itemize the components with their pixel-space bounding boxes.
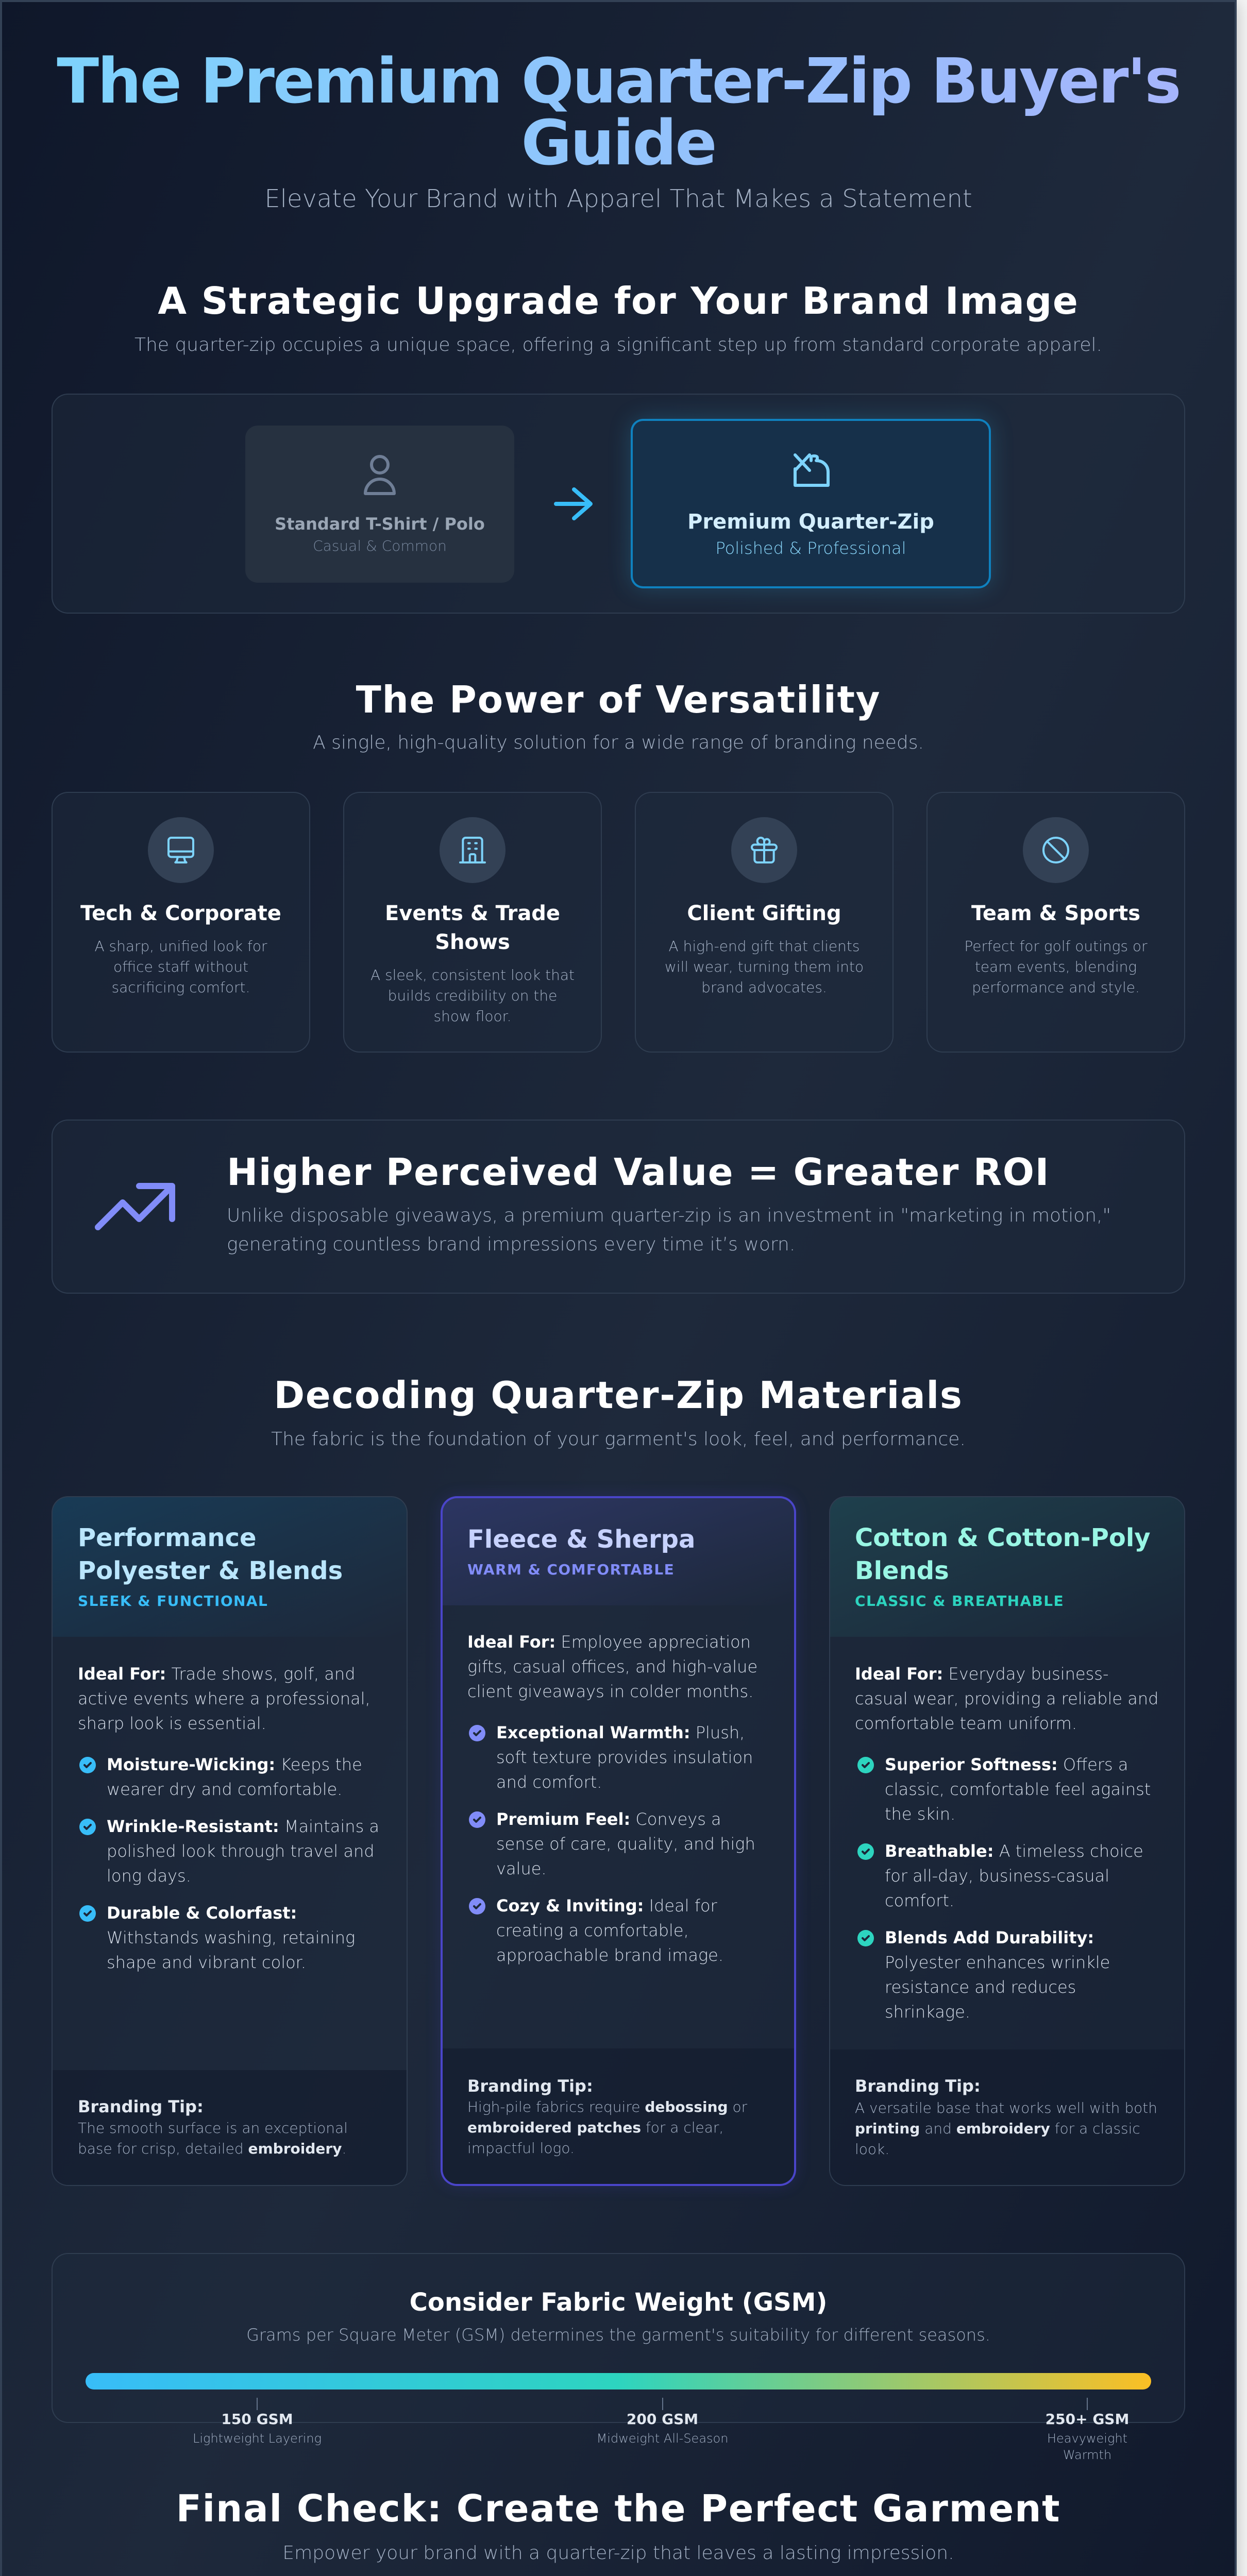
panel: performance polyester: shape and vibrant color. [107, 1953, 306, 1972]
material tag: CLASSIC & BREATHABLE [855, 1592, 1064, 1609]
benefit: Moisture-Wicking: Keeps the [107, 1755, 362, 1774]
gsm gradient bar [86, 2373, 1151, 2389]
card text: will wear, turning them into [665, 958, 864, 975]
card text: sacrificing comfort. [112, 979, 250, 996]
card text: A sleek, consistent look that [370, 967, 575, 984]
benefit: Exceptional Warmth: Plush, [496, 1723, 745, 1742]
panel heading: Consider Fabric Weight (GSM) [410, 2288, 827, 2317]
material name: Cotton & Cotton-Poly [855, 1523, 1151, 1552]
card text: A sharp, unified look for [94, 938, 267, 955]
panel: upgrade comparison [52, 394, 1185, 614]
card text: builds credibility on the [388, 987, 557, 1004]
callout text [227, 1205, 1111, 1255]
benefit: Premium Feel: Conveys a [496, 1809, 721, 1829]
material tag: WARM & COMFORTABLE [467, 1561, 675, 1578]
card title: Tech & Corporate [80, 902, 281, 925]
card text [665, 938, 864, 996]
card text [964, 938, 1148, 996]
card title [385, 902, 560, 954]
panel: fleece and sherpa: creating a comfortable, [496, 1921, 689, 1940]
ideal for text [78, 1664, 370, 1733]
panel: fleece and sherpa: approachable brand image. [496, 1945, 723, 1965]
section: final check [52, 2478, 1185, 2576]
benefit [467, 1720, 776, 1745]
panel: fleece and sherpa [441, 1496, 796, 2186]
marker: 200 gsm: 200 GSM [627, 2411, 698, 2428]
header [57, 45, 1180, 213]
card: tech and corporate [52, 792, 310, 1053]
card: premium quarter-zip [631, 419, 991, 588]
card: client gifting [635, 792, 894, 1053]
card text: A high-end gift that clients [669, 938, 860, 955]
branding tip: The smooth surface is an exceptional [78, 2120, 348, 2137]
benefit [77, 1901, 386, 1925]
marker: 150 gsm: 150 GSM [221, 2411, 293, 2428]
panel: fabric weight [52, 2253, 1185, 2423]
material name: Performance [78, 1523, 257, 1552]
intro text: The fabric is the foundation of your garment's look, feel, and performance. [271, 1428, 966, 1450]
card: events and trade shows [343, 792, 602, 1053]
card caption: Polished & Professional [715, 538, 906, 558]
card: team and sports [926, 792, 1185, 1053]
panel: cotton blends [829, 1496, 1185, 2186]
ideal for text: Ideal For: Everyday business- [855, 1664, 1109, 1684]
card title: Standard T-Shirt / Polo [275, 514, 485, 534]
branding tip [53, 2070, 407, 2185]
icon: trending up [95, 1183, 175, 1230]
panel: perceived value callout [52, 1120, 1185, 1294]
card text [94, 938, 267, 996]
panel: performance polyester: polished look through travel and [107, 1841, 375, 1861]
ideal for text: active events where a professional, [78, 1689, 370, 1708]
benefit: Blends Add Durability: [885, 1928, 1094, 1947]
card title: Client Gifting [687, 902, 841, 925]
card text: Perfect for golf outings or [964, 938, 1148, 955]
panel: cotton blends: the skin. [885, 1804, 955, 1824]
card: standard t-shirt [245, 426, 514, 583]
material name [855, 1521, 1151, 1587]
marker: 200 gsm [580, 2398, 745, 2475]
title [52, 50, 1185, 174]
card text: office staff without [113, 958, 248, 975]
arrow [554, 487, 593, 520]
ideal for text: comfortable team uniform. [855, 1714, 1077, 1733]
panel: fleece and sherpa: soft texture provides insulation [496, 1748, 753, 1767]
title: Guide [521, 107, 716, 179]
benefit [467, 1807, 776, 1832]
title: The Premium Quarter-Zip Buyer's [57, 45, 1180, 117]
marker: 200 gsm: Midweight All-Season [597, 2431, 728, 2446]
marker: 250 gsm: Heavyweight [1047, 2431, 1127, 2446]
benefit: Cozy & Inviting: Ideal for [496, 1896, 717, 1916]
panel: fleece and sherpa: sense of care, quality, and high [496, 1834, 755, 1854]
branding tip: Branding Tip: [855, 2076, 981, 2096]
benefit [855, 1752, 1165, 1777]
panel: cotton blends: shrinkage. [885, 2002, 970, 2022]
subtitle: Elevate Your Brand with Apparel That Makes a Statement [264, 184, 972, 213]
ideal for text: Ideal For: Trade shows, golf, and [78, 1664, 356, 1684]
ideal for text [467, 1630, 757, 1704]
callout text: generating countless brand impressions every time it’s worn. [227, 1233, 795, 1255]
card text: team events, blending [975, 958, 1137, 975]
panel text: Grams per Square Meter (GSM) determines the garment's suitability for different seasons. [246, 2325, 990, 2345]
panel: performance polyester: Withstands washing, retaining [107, 1928, 355, 1947]
benefit [855, 1925, 1165, 1950]
card text: performance and style. [972, 979, 1140, 996]
heading: Decoding Quarter-Zip Materials [274, 1374, 963, 1417]
benefit: Superior Softness: Offers a [885, 1755, 1128, 1774]
card header [443, 1498, 794, 1605]
ideal for text: sharp look is essential. [78, 1714, 266, 1733]
panel: cotton blends: comfort. [885, 1891, 954, 1910]
intro text: The quarter-zip occupies a unique space, offering a significant step up from standard corporate apparel. [134, 334, 1102, 355]
panel: performance polyester: wearer dry and comfortable. [107, 1780, 342, 1799]
branding tip: embroidered patches for a clear, [467, 2119, 723, 2136]
card text: brand advocates. [701, 979, 827, 996]
heading: A Strategic Upgrade for Your Brand Image [158, 279, 1079, 323]
heading: Final Check: Create the Perfect Garment [176, 2487, 1060, 2530]
branding tip: High-pile fabrics require debossing or [467, 2098, 747, 2115]
ideal for text [855, 1662, 1158, 1736]
benefit [855, 1839, 1165, 1863]
branding tip: Branding Tip: [78, 2097, 204, 2116]
branding tip: impactful logo. [467, 2140, 575, 2157]
branding tip [830, 2049, 1184, 2185]
branding tip: printing and embroidery for a classic [855, 2120, 1140, 2137]
ideal for text: casual wear, providing a reliable and [855, 1689, 1158, 1708]
callout text: Unlike disposable giveaways, a premium quarter-zip is an investment in "marketing in motion," [227, 1205, 1111, 1226]
panel: performance polyester: long days. [107, 1866, 191, 1886]
panel: cotton blends: resistance and reduces [885, 1977, 1076, 1997]
benefit [467, 1893, 776, 1918]
card header [830, 1497, 1184, 1637]
branding tip: Branding Tip: [467, 2076, 593, 2096]
benefit: Wrinkle-Resistant: Maintains a [107, 1817, 379, 1836]
panel: performance polyester [52, 1496, 408, 2186]
icon: monitor [148, 817, 214, 883]
icon: ban circle [1023, 817, 1089, 883]
branding tip: A versatile base that works well with both [855, 2099, 1157, 2116]
card text: show floor. [433, 1008, 511, 1025]
panel: cotton blends: Polyester enhances wrinkle [885, 1953, 1110, 1972]
ideal for text: client giveaways in colder months. [467, 1682, 753, 1701]
card text [370, 967, 575, 1025]
icon: gift [731, 817, 797, 883]
card caption: Casual & Common [313, 537, 447, 554]
marker: 150 gsm [175, 2398, 340, 2475]
branding tip: base for crisp, detailed embroidery. [78, 2140, 346, 2157]
branding tip [443, 2048, 794, 2184]
panel: cotton blends: for all-day, business-casual [885, 1866, 1109, 1886]
card title: Events & Trade [385, 902, 560, 925]
card header [53, 1497, 407, 1637]
section: materials [52, 1374, 1185, 2191]
branding tip: look. [855, 2141, 889, 2158]
card title: Shows [435, 930, 510, 954]
intro text: Empower your brand with a quarter-zip that leaves a lasting impression. [282, 2542, 954, 2564]
material tag: SLEEK & FUNCTIONAL [78, 1592, 268, 1609]
marker: 250 gsm: 250+ GSM [1046, 2411, 1129, 2428]
icon: building [440, 817, 505, 883]
ideal for text: Ideal For: Employee appreciation [467, 1632, 751, 1652]
benefit [77, 1814, 386, 1839]
callout heading: Higher Perceived Value = Greater ROI [227, 1150, 1050, 1194]
panel: fleece and sherpa: and comfort. [496, 1772, 602, 1792]
marker: 250 gsm: Warmth [1063, 2448, 1111, 2462]
section: versatility [52, 678, 1185, 1053]
panel: cotton blends: classic, comfortable feel against [885, 1780, 1151, 1799]
benefit [77, 1752, 386, 1777]
material name: Blends [855, 1556, 949, 1585]
section: strategic upgrade [52, 279, 1185, 614]
material name [78, 1523, 343, 1585]
material name: Polyester & Blends [78, 1556, 343, 1585]
intro text: A single, high-quality solution for a wide range of branding needs. [313, 732, 924, 753]
marker: 150 gsm: Lightweight Layering [193, 2431, 322, 2446]
card title: Premium Quarter-Zip [687, 510, 934, 534]
icon: person [364, 455, 396, 495]
marker: 250 gsm [1005, 2398, 1170, 2475]
benefit: Durable & Colorfast: [107, 1903, 297, 1923]
material name: Fleece & Sherpa [467, 1525, 695, 1554]
heading: The Power of Versatility [356, 678, 881, 721]
panel: fleece and sherpa: value. [496, 1859, 547, 1878]
card title: Team & Sports [971, 902, 1140, 925]
ideal for text: gifts, casual offices, and high-value [467, 1657, 757, 1676]
icon: quarter-zip [794, 453, 830, 487]
benefit: Breathable: A timeless choice [885, 1841, 1143, 1861]
